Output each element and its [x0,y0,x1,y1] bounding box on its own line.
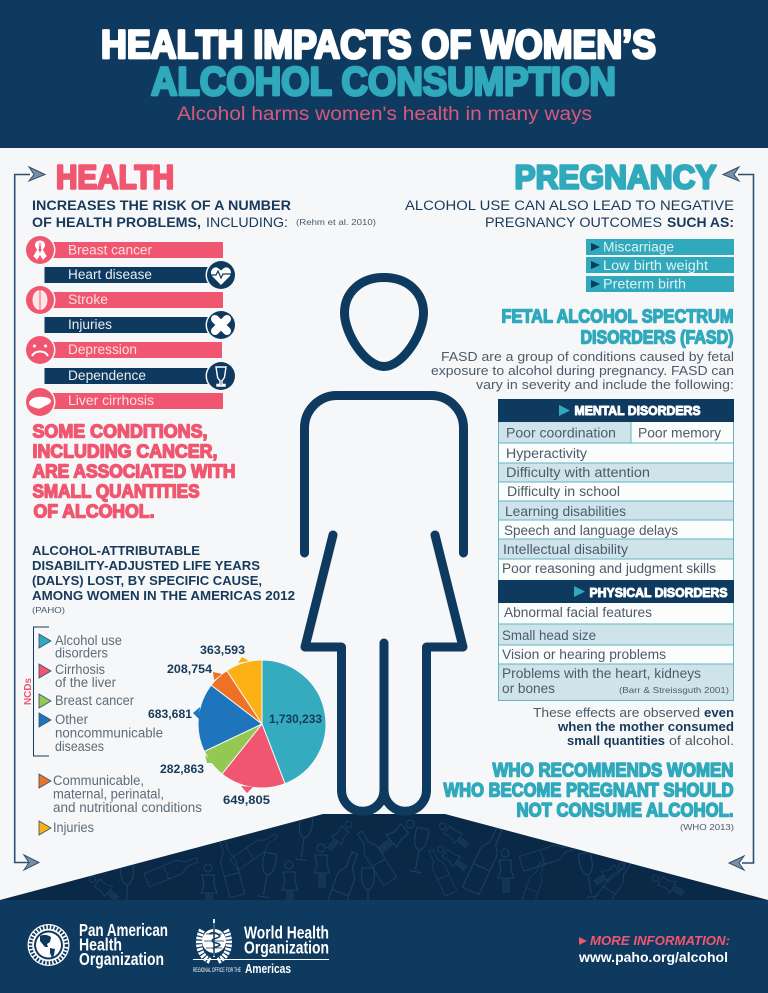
WHO wordmark: Organization [244,938,329,958]
WHO wordmark: World Health [244,922,329,942]
health intro text [32,198,376,230]
NCDs bracket: NCDs [23,678,34,705]
heading: health: HEALTH [56,158,174,196]
stroke bar: Stroke [68,292,108,307]
physical disorders rows: Problems with the heart, kidneys [502,666,701,681]
title line 2: ALCOHOL CONSUMPTION [151,60,616,104]
more information: www.paho.org/alcohol [578,950,728,965]
right bracket arrow: pregnancy [723,167,754,870]
title line 1: HEALTH IMPACTS OF WOMEN’S [101,23,656,67]
callout: WHO recommendation: NOT CONSUME ALCOHOL. [516,800,734,822]
pie chart values: 363,593 [200,645,245,657]
PAHO wordmark: Health [79,934,122,954]
heading: FASD: FETAL ALCOHOL SPECTRUM [502,306,734,326]
dependence bar: Dependence [68,368,146,383]
chart heading: AMONG WOMEN IN THE AMERICAS 2012 [32,589,295,603]
injuries bar [44,310,236,340]
PAHO wordmark: Organization [79,949,164,969]
mental disorders rows: Difficulty in school [507,484,620,499]
legend: alcohol use disorders: Alcohol use [55,633,122,648]
legend: communicable conditions: and nutritional conditions [53,800,202,815]
PAHO wordmark [79,920,168,969]
woman figure outline [304,278,464,811]
small quantities note: even [704,705,734,720]
WHO wordmark: REGIONAL OFFICE FOR THE [193,968,241,974]
mental disorders rows: Hyperactivity [506,446,587,461]
chart heading: (DALYS) LOST, BY SPECIFIC CAUSE, [32,574,262,588]
physical disorders rows: Abnormal facial features [504,605,652,620]
pregnancy outcomes list [586,239,734,292]
pregnancy intro text: PREGNANCY OUTCOMES [485,215,662,230]
legend: other noncommunicable diseases: diseases [55,739,104,754]
table: FASD disorders [498,399,734,700]
pregnancy intro text [405,198,734,230]
footer band [0,900,768,993]
panel: pregnancy [405,158,734,832]
panel: health [23,158,376,835]
teal row fills [498,422,734,700]
health intro text: INCREASES THE RISK OF A NUMBER [32,198,291,213]
pie chart values: 683,681 [148,709,193,721]
callout: small quantities: SMALL QUANTITIES [32,480,200,502]
health intro text: INCLUDING: [206,215,288,230]
liver cirrhosis bar [24,386,223,418]
liver cirrhosis bar: Liver cirrhosis [68,393,154,408]
dependence bar [44,360,236,392]
small quantities note: when the mother consumed [557,719,734,734]
chart legend [23,627,202,835]
head [344,278,424,366]
physical disorders rows: Small head size [502,628,596,643]
left bracket arrow: health [15,167,45,870]
preterm birth [586,276,734,292]
header: physical disorders [498,580,734,603]
logo: PAHO [28,920,168,969]
legend: other noncommunicable diseases: Other [55,712,88,727]
legend: communicable conditions [39,773,202,815]
pie chart values: 1,730,233 [269,714,322,726]
callout: small quantities [32,420,236,522]
health intro text: (Rehm et al. 2010) [296,217,376,227]
breast cancer bar [24,234,223,266]
dress and legs [305,535,463,811]
legend: breast cancer: Breast cancer [55,693,134,708]
mental disorders rows [502,426,721,576]
legend: alcohol use disorders: disorders [55,646,108,660]
mental disorders rows: Intellectual disability [503,542,628,557]
WHO wordmark: Americas [245,961,291,976]
stroke bar [24,284,223,316]
mental disorders rows: Poor reasoning and judgment skills [502,561,716,576]
small quantities note [533,705,734,748]
pregnancy intro text: SUCH AS: [667,215,734,230]
health intro text: OF HEALTH PROBLEMS, [32,215,201,230]
low birth weight [586,257,734,273]
pie chart values: 208,754 [167,664,213,676]
callout: small quantities: ARE ASSOCIATED WITH [32,460,236,482]
heading: pregnancy: PREGNANCY [514,158,716,196]
footer background triangle with pattern [0,814,768,900]
mental disorders rows: Learning disabilities [505,504,626,519]
logo: WHO [193,919,329,976]
callout: small quantities: SOME CONDITIONS, [32,420,208,442]
heart disease bar: Heart disease [68,267,152,282]
legend: cirrhosis of the liver: of the liver [55,675,116,690]
pie chart [193,657,326,793]
miscarriage [586,239,734,255]
FASD description: exposure to alcohol during pregnancy. FASD can [431,363,734,378]
more information: MORE INFORMATION: [590,934,730,948]
callout: WHO recommendation [444,760,734,822]
shoulders and arms [304,396,464,553]
mental disorders rows: Speech and language delays [504,523,678,538]
header: physical disorders: PHYSICAL DISORDERS [590,585,728,600]
mental disorders rows: Poor coordination [506,426,616,440]
chart heading: ALCOHOL-ATTRIBUTABLE [32,544,200,558]
FASD description: FASD are a group of conditions caused by fetal [441,349,734,364]
small quantities note: small quantities [567,733,665,748]
callout: small quantities: INCLUDING CANCER, [32,440,218,462]
chart heading: DISABILITY-ADJUSTED LIFE YEARS [32,559,260,573]
icon: PAHO emblem [28,924,70,966]
callout: small quantities: OF ALCOHOL. [34,500,154,522]
pie chart values: 649,805 [223,795,271,807]
legend: communicable conditions: maternal, perinatal, [53,786,164,802]
low birth weight: Low birth weight [603,258,708,273]
physical disorders rows: Vision or hearing problems [502,647,666,662]
health problems list [24,234,236,418]
pie chart values: 282,863 [160,764,204,776]
callout: WHO recommendation: WHO RECOMMENDS WOMEN [492,760,734,782]
WHO wordmark [193,922,329,976]
depression bar [24,334,222,366]
legend: cirrhosis of the liver [39,662,116,690]
mental disorders rows: Difficulty with attention [506,465,650,480]
subtitle: Alcohol harms women's health in many ways [177,104,592,125]
breast cancer bar: Breast cancer [68,242,152,258]
small quantities note: These effects are observed [533,705,700,720]
icon: WHO emblem [199,919,229,961]
header: mental disorders [498,399,734,422]
depression bar: Depression [68,342,137,357]
physical disorders rows [502,605,729,696]
injuries bar: Injuries [68,317,112,332]
heading: FASD [502,306,734,348]
chart source: (PAHO) [32,605,65,615]
legend: cirrhosis of the liver: Cirrhosis [55,662,105,677]
WHO source: (WHO 2013) [680,822,734,832]
chart heading [32,544,295,603]
mental disorders rows: Poor memory [638,426,721,440]
legend: communicable conditions: Communicable, [53,773,144,788]
legend: alcohol use disorders [39,633,122,660]
legend: other noncommunicable diseases: noncommunicable [55,726,163,740]
FASD description: vary in severity and include the following: [476,377,734,392]
heart disease bar [44,260,236,290]
physical disorders rows: (Barr & Streissguth 2001) [619,686,729,695]
legend: injuries: Injuries [53,820,94,835]
physical disorders rows: or bones [502,681,555,696]
FASD description [431,349,734,392]
more information [578,934,730,965]
NCDs bracket [23,627,49,756]
header band [0,0,768,148]
legend: other noncommunicable diseases [39,712,163,754]
header: mental disorders: MENTAL DISORDERS [574,403,701,418]
small quantities note: of alcohol. [669,733,734,748]
heading: FASD: DISORDERS (FASD) [580,326,734,348]
pregnancy intro text: ALCOHOL USE CAN ALSO LEAD TO NEGATIVE [405,198,734,213]
PAHO wordmark: Pan American [79,920,168,940]
pie chart values [148,645,322,807]
miscarriage: Miscarriage [603,240,674,254]
preterm birth: Preterm birth [603,276,686,292]
